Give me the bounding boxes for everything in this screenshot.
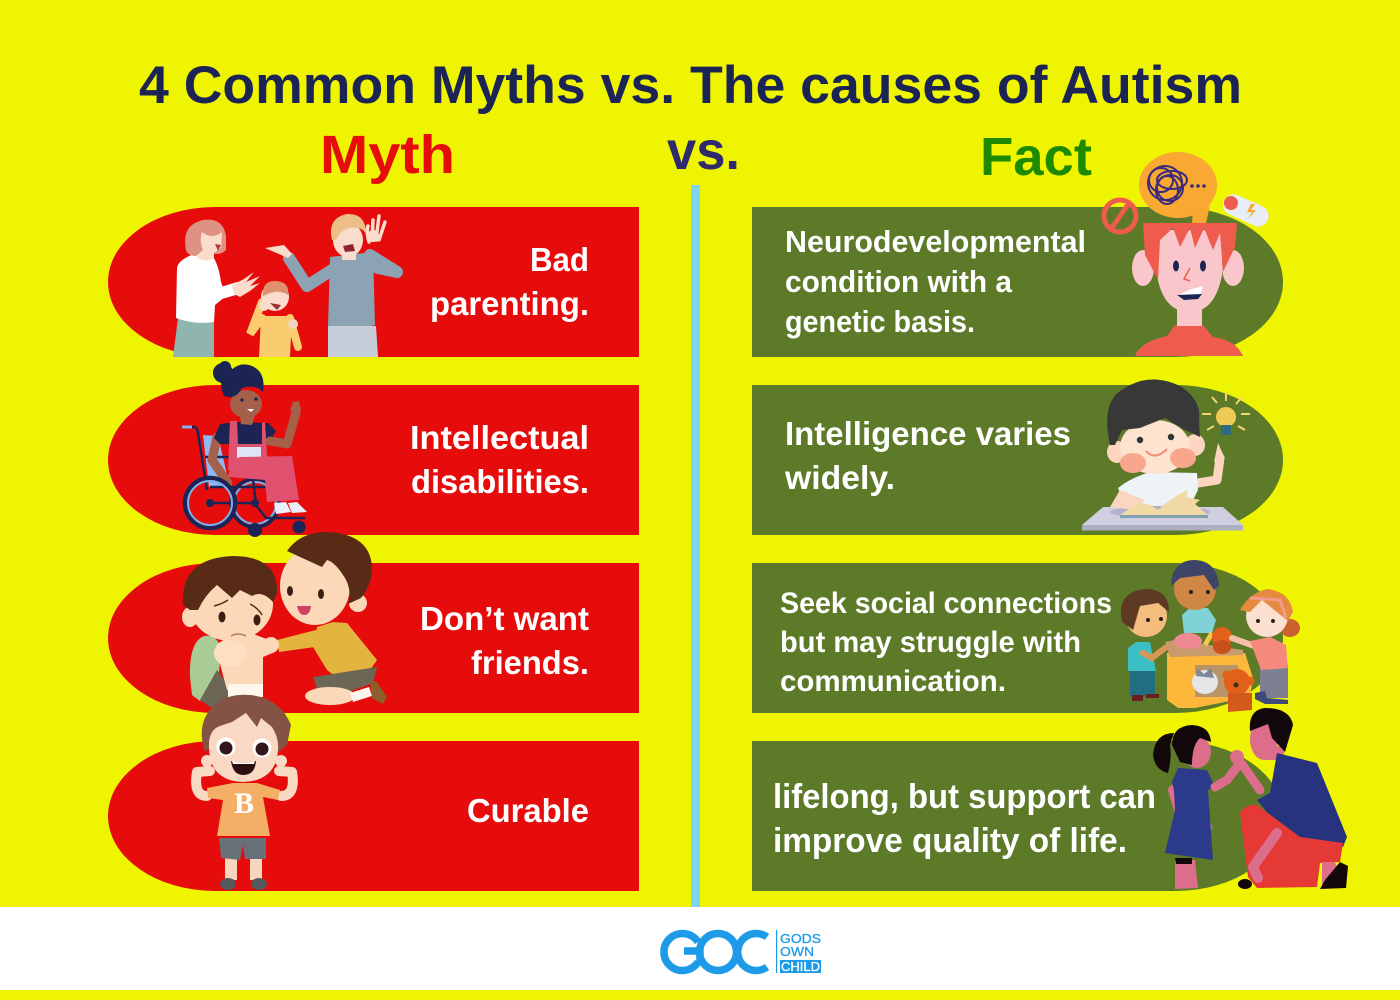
text: lifelong but support: improve quality of life. xyxy=(773,822,1127,860)
text: intellectual disabilities: Intellectual xyxy=(410,419,589,456)
panel: myth 2 intellectual disabilities xyxy=(108,361,639,537)
text: lifelong but support: lifelong, but support can xyxy=(773,778,1156,816)
text: bad parenting: parenting. xyxy=(430,285,589,322)
logo: GOC Gods Own Child: OWN xyxy=(780,944,814,959)
text: intelligence varies widely: widely. xyxy=(784,459,895,496)
logo: GOC Gods Own Child: GODS xyxy=(780,931,821,946)
logo: GOC Gods Own Child: CHILD xyxy=(781,959,820,974)
text: intelligence varies widely xyxy=(784,415,1071,496)
text: intelligence varies widely: Intelligence varies xyxy=(785,415,1071,452)
text: neurodevelopmental condition xyxy=(785,224,1086,339)
panel: myth 3 do not want friends xyxy=(108,532,639,713)
text: don't want friends: friends. xyxy=(471,644,589,681)
text: intellectual disabilities: disabilities. xyxy=(411,463,589,500)
logo: GOC Gods Own Child xyxy=(664,930,821,974)
text: lifelong but support xyxy=(773,778,1156,860)
text: bad parenting: Bad xyxy=(530,241,589,278)
panel: myth 4 curable xyxy=(108,695,639,891)
illustration: flexing boy: B xyxy=(234,787,254,820)
text: curable: Curable xyxy=(467,792,589,829)
text: seek social connections: communication. xyxy=(780,665,1006,698)
illustration: arguing parents and crying child xyxy=(173,214,397,357)
text: intellectual disabilities xyxy=(410,419,589,500)
text: neurodevelopmental condition: genetic basis. xyxy=(785,304,975,339)
text: don't want friends xyxy=(420,600,589,681)
text: seek social connections xyxy=(780,587,1112,698)
text: neurodevelopmental condition: condition with a xyxy=(785,264,1013,299)
text: seek social connections: but may struggle with xyxy=(780,626,1081,659)
panel: fact 3 social connections xyxy=(752,560,1300,713)
text: bad parenting xyxy=(430,241,589,322)
panel: fact 1 neurodevelopmental xyxy=(752,152,1283,357)
text: seek social connections: Seek social connections xyxy=(780,587,1112,620)
title: 4 Common Myths vs. The causes of Autism xyxy=(139,56,1242,115)
illustration: boy with open head and tangled thought xyxy=(1104,152,1272,356)
panel: fact 2 intelligence varies xyxy=(752,379,1283,535)
heading: Fact: Fact xyxy=(980,127,1092,187)
text: neurodevelopmental condition: Neurodevelopmental xyxy=(785,224,1086,259)
illustration: father and daughter pinky promise xyxy=(1153,708,1348,889)
illustration: children playing with toys xyxy=(1121,560,1300,712)
centre divider xyxy=(691,185,700,907)
illustration: boy comforting sad boy xyxy=(182,532,387,708)
text: don't want friends: Don’t want xyxy=(420,600,589,637)
illustration: boy reading with light bulb xyxy=(1082,379,1250,530)
illustration: girl in wheelchair xyxy=(182,361,307,537)
heading: vs.: vs. xyxy=(667,121,740,181)
heading: Myth: Myth xyxy=(320,125,455,185)
illustration: flexing boy xyxy=(196,695,293,890)
panel: fact 4 lifelong support xyxy=(752,708,1348,891)
panel: myth 1 bad parenting xyxy=(108,207,639,357)
